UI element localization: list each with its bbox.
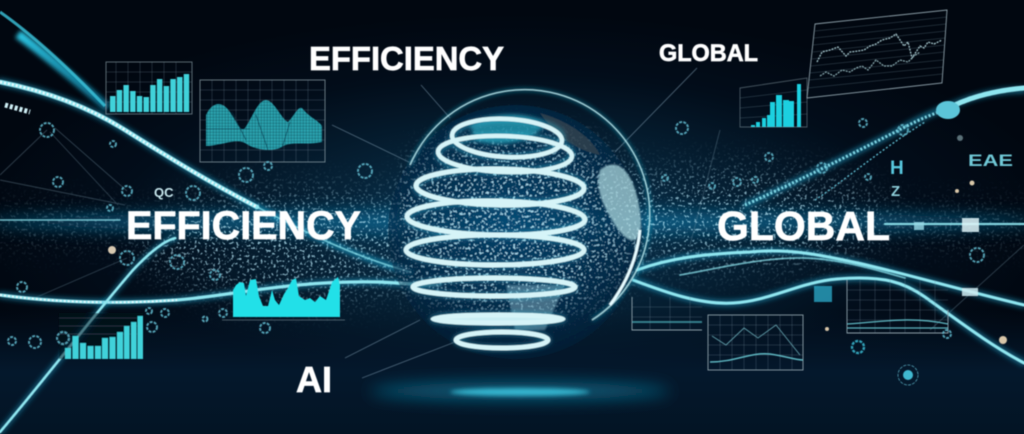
tiny glyph labels bbox=[154, 151, 1013, 200]
data stream: left horizontal bbox=[0, 282, 440, 302]
data stream: upper-right bbox=[745, 88, 1024, 205]
area chart: bright cyan spikes bbox=[222, 277, 345, 320]
globe speckle bbox=[400, 125, 640, 315]
particle field bbox=[0, 105, 1024, 352]
panel: lower mountain chart bbox=[708, 315, 803, 370]
label: EFFICIENCY top: EFFICIENCY bbox=[309, 40, 504, 77]
bar chart: lower-left bbox=[59, 313, 143, 359]
network node icons bbox=[5, 105, 1007, 385]
data stream: upper-left curve bbox=[0, 82, 410, 272]
label: EFFICIENCY left: EFFICIENCY bbox=[126, 204, 361, 248]
globe rim bbox=[410, 90, 650, 320]
spiral glow bbox=[406, 119, 585, 348]
line chart: top-right panel bbox=[807, 10, 947, 98]
globe bbox=[388, 90, 650, 359]
panel: grid chart behind globe bbox=[632, 297, 702, 330]
tiny glyph labels: EAE bbox=[968, 151, 1013, 170]
horizontal light beams bbox=[0, 220, 1024, 224]
bar chart: upper-right bbox=[740, 78, 807, 127]
globe body bbox=[388, 105, 642, 359]
data stream: rising diagonal bbox=[0, 238, 176, 432]
area chart: wave mountains bbox=[200, 80, 325, 162]
floor glow bbox=[370, 382, 670, 400]
spiral rings bbox=[406, 116, 585, 348]
panel: right grid chart bbox=[847, 280, 948, 333]
bar chart: top-left bbox=[106, 62, 192, 114]
label: GLOBAL right: GLOBAL bbox=[717, 203, 890, 249]
data stream: top-left beam bbox=[0, 12, 108, 108]
label: GLOBAL top: GLOBAL bbox=[659, 40, 758, 67]
label: AI: AI bbox=[296, 359, 332, 400]
tiny glyph labels: Z bbox=[891, 183, 900, 200]
leader lines bbox=[0, 68, 1024, 378]
tiny glyph labels: H bbox=[890, 158, 904, 179]
data stream: right lower bbox=[633, 258, 1024, 363]
tiny glyph labels: QC bbox=[154, 185, 174, 200]
continent patches bbox=[470, 113, 641, 330]
data stream: right upper bbox=[637, 251, 1024, 305]
